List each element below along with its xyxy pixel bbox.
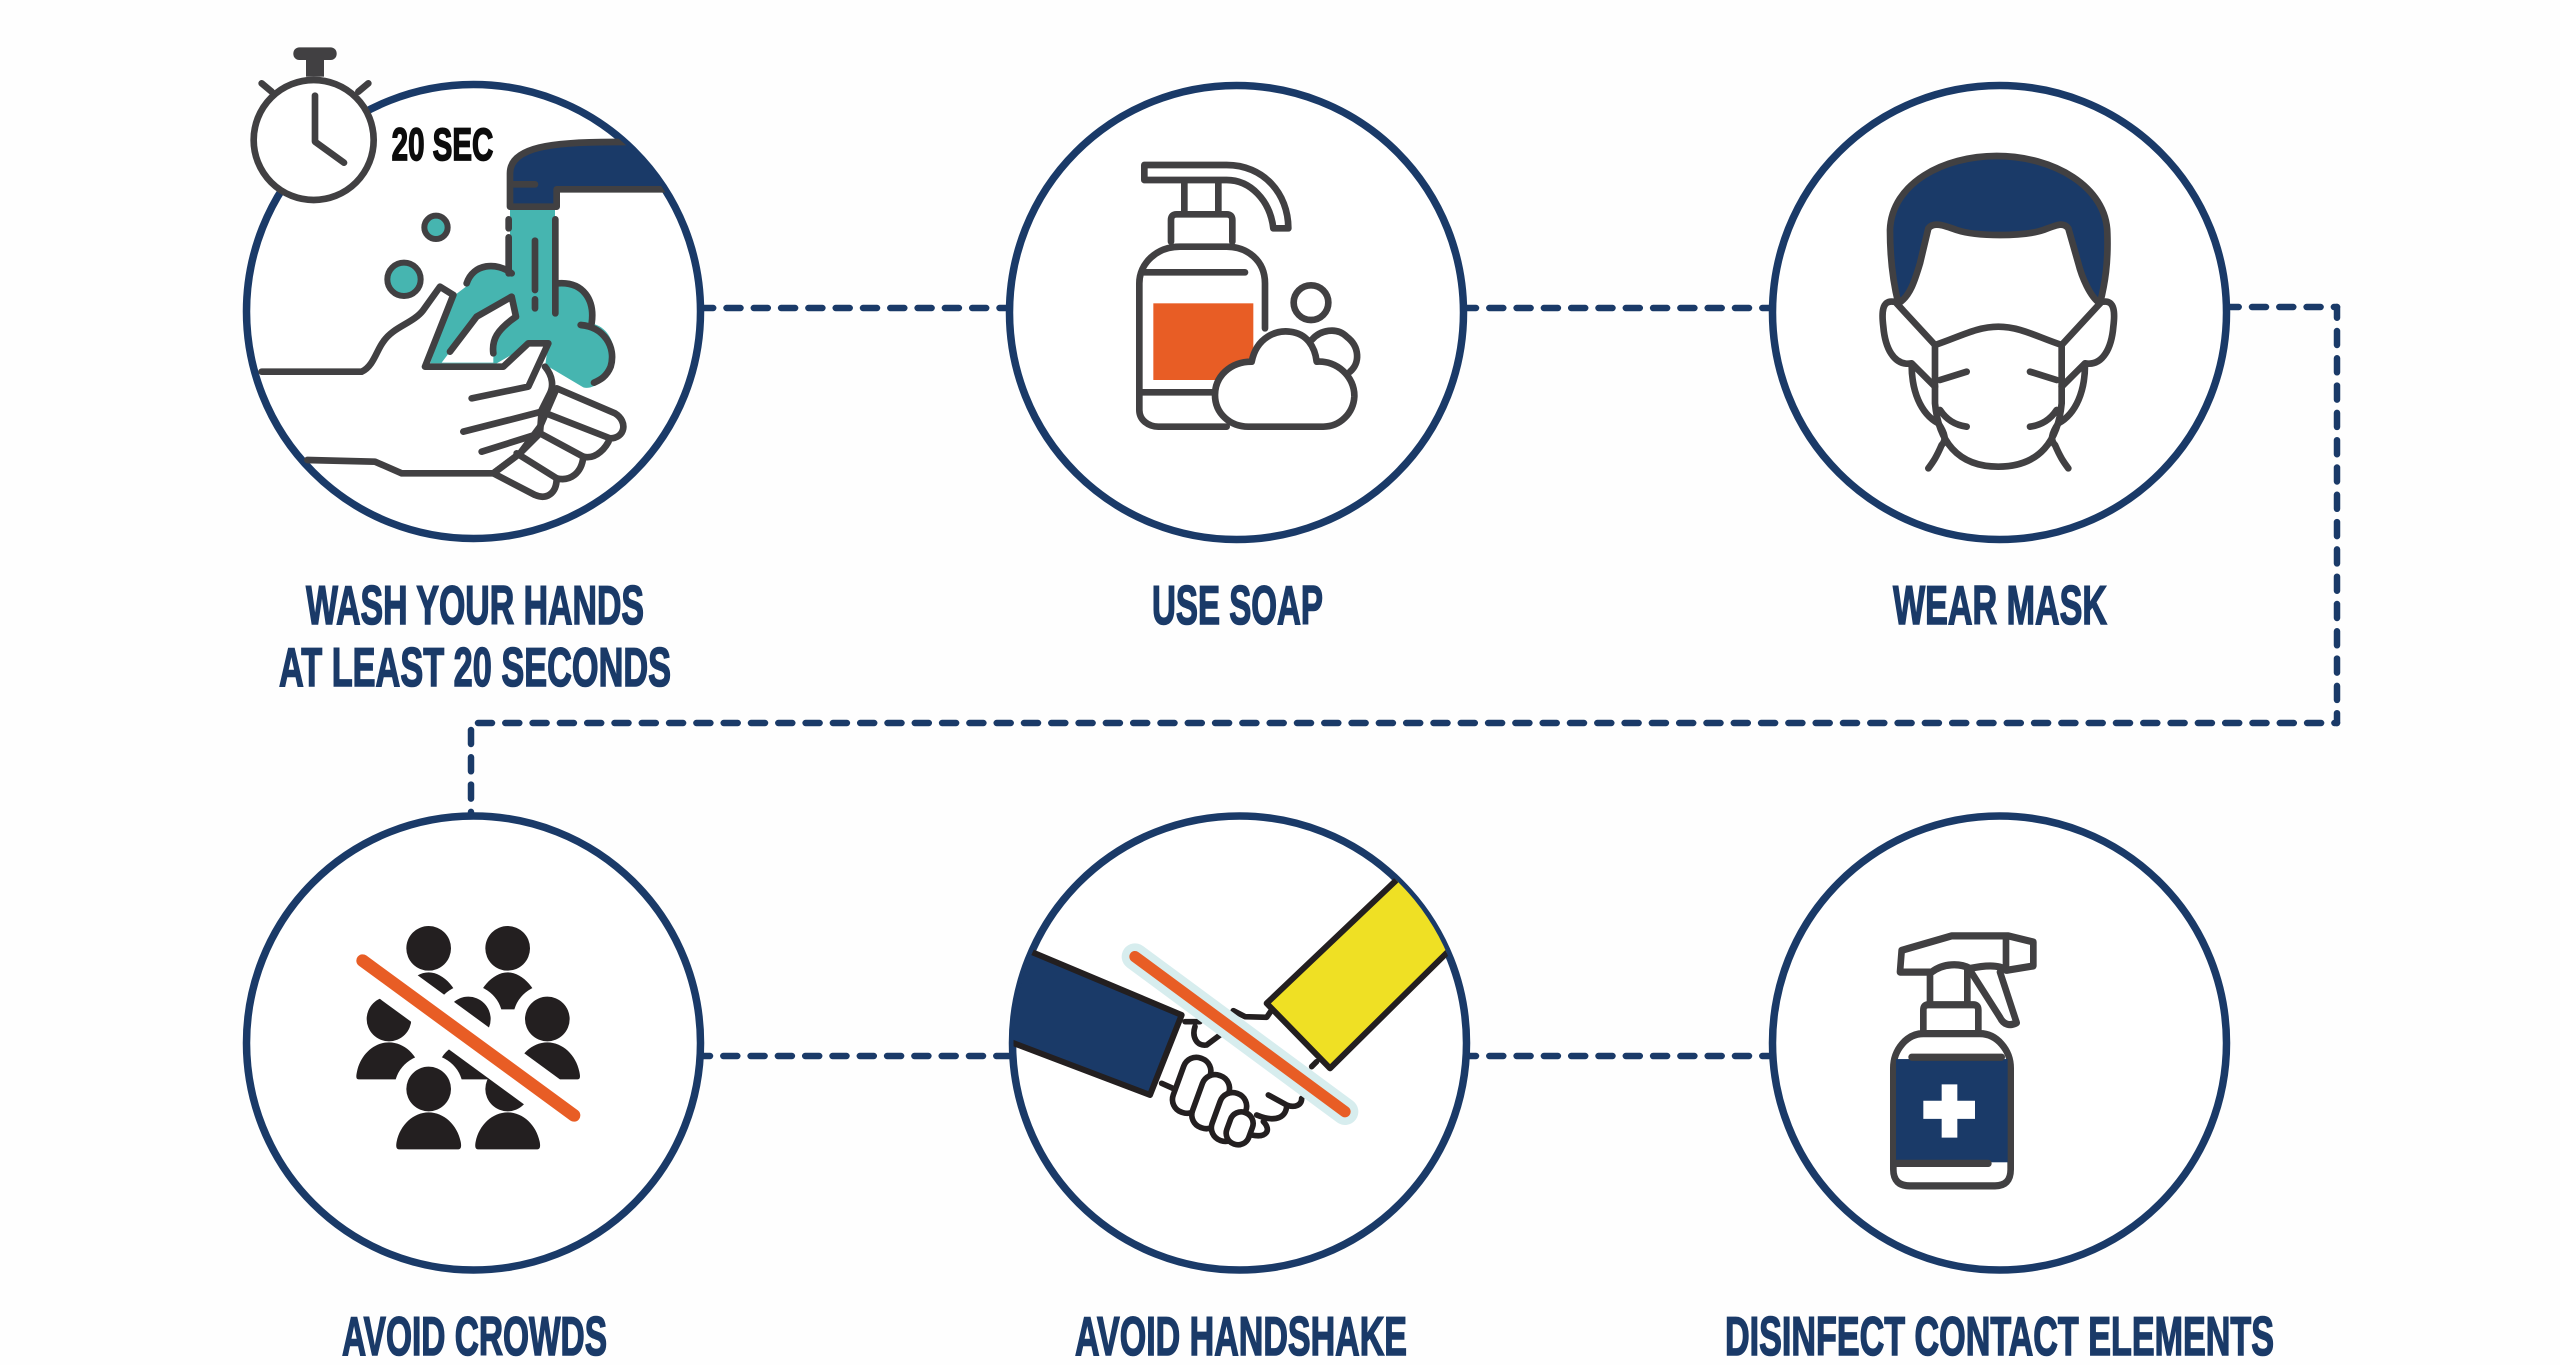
icon: bottle outline: [1139, 165, 1288, 427]
arrow: connector handshake to disinfect: [1462, 1053, 1776, 1059]
icon: yellow sleeve: [1264, 878, 1448, 1072]
circle: mask: [1772, 86, 2226, 540]
icon: mask: [1935, 327, 2062, 467]
circle: wash: [246, 84, 700, 538]
icon: spray head: [1900, 936, 2033, 1032]
icon: ears and straps: [1883, 302, 2114, 468]
circle: handshake: [1012, 816, 1466, 1270]
icon: front hand fingers: [307, 367, 623, 497]
icon: head with mask: [1883, 156, 2114, 468]
icon: water lines and foam outline: [387, 216, 612, 383]
panel: disinfect contact elements: [1725, 816, 2274, 1365]
label: wear mask: WEAR MASK: [1893, 574, 2107, 636]
label: wash your hands: AT LEAST 20 SECONDS: [279, 636, 671, 698]
icon: crowd crossed out: [355, 926, 582, 1149]
arrow: connector mask down and back to crowds: [471, 307, 2337, 818]
icon: tap: [510, 142, 693, 207]
icon: foam cloud and bubbles: [1215, 285, 1357, 427]
circle: soap: [1010, 86, 1464, 540]
text: 20 sec: 20 SEC: [392, 119, 493, 170]
icon: navy label with cross: [1896, 1057, 2008, 1163]
arrow: connector crowds to handshake: [696, 1053, 1016, 1059]
icon: back hand: [262, 287, 553, 473]
circle: crowds: [246, 816, 700, 1270]
icon: washing hands under tap: [254, 47, 693, 497]
panel: wear mask: [1772, 86, 2226, 636]
arrow: connector wash to soap: [699, 305, 1012, 311]
panel: avoid handshake: [983, 816, 1483, 1365]
arrow: connector soap to mask: [1462, 305, 1776, 311]
icon: bottle label: [1153, 303, 1253, 380]
icon: soap pump and foam: [1139, 165, 1357, 427]
label: use soap: USE SOAP: [1152, 574, 1323, 636]
icon: handshake crossed out: [983, 845, 1483, 1148]
icon: bottle body: [1893, 1034, 2011, 1186]
icon: orange cross-out bar with halo: [1135, 957, 1345, 1112]
panel: avoid crowds: [246, 816, 700, 1365]
circle: disinfect: [1772, 816, 2226, 1270]
panel: wash your hands: [246, 47, 700, 698]
icon: navy sleeve: [1014, 950, 1185, 1098]
label: wash your hands: WASH YOUR HANDS: [306, 574, 644, 636]
icon: foam and water: [430, 208, 614, 388]
icon: spray bottle: [1893, 936, 2033, 1186]
icon: front row people: [394, 1055, 540, 1149]
panel: use soap: [1010, 86, 1464, 636]
icon: back row people: [396, 926, 540, 1009]
icon: hair: [1890, 156, 2108, 303]
icon: hand lines: [1162, 1010, 1317, 1148]
icon: stopwatch: [254, 47, 374, 200]
icon: orange cross-out bar: [363, 961, 574, 1115]
icon: middle row people: [355, 985, 582, 1079]
label: wash your hands: [279, 574, 671, 698]
